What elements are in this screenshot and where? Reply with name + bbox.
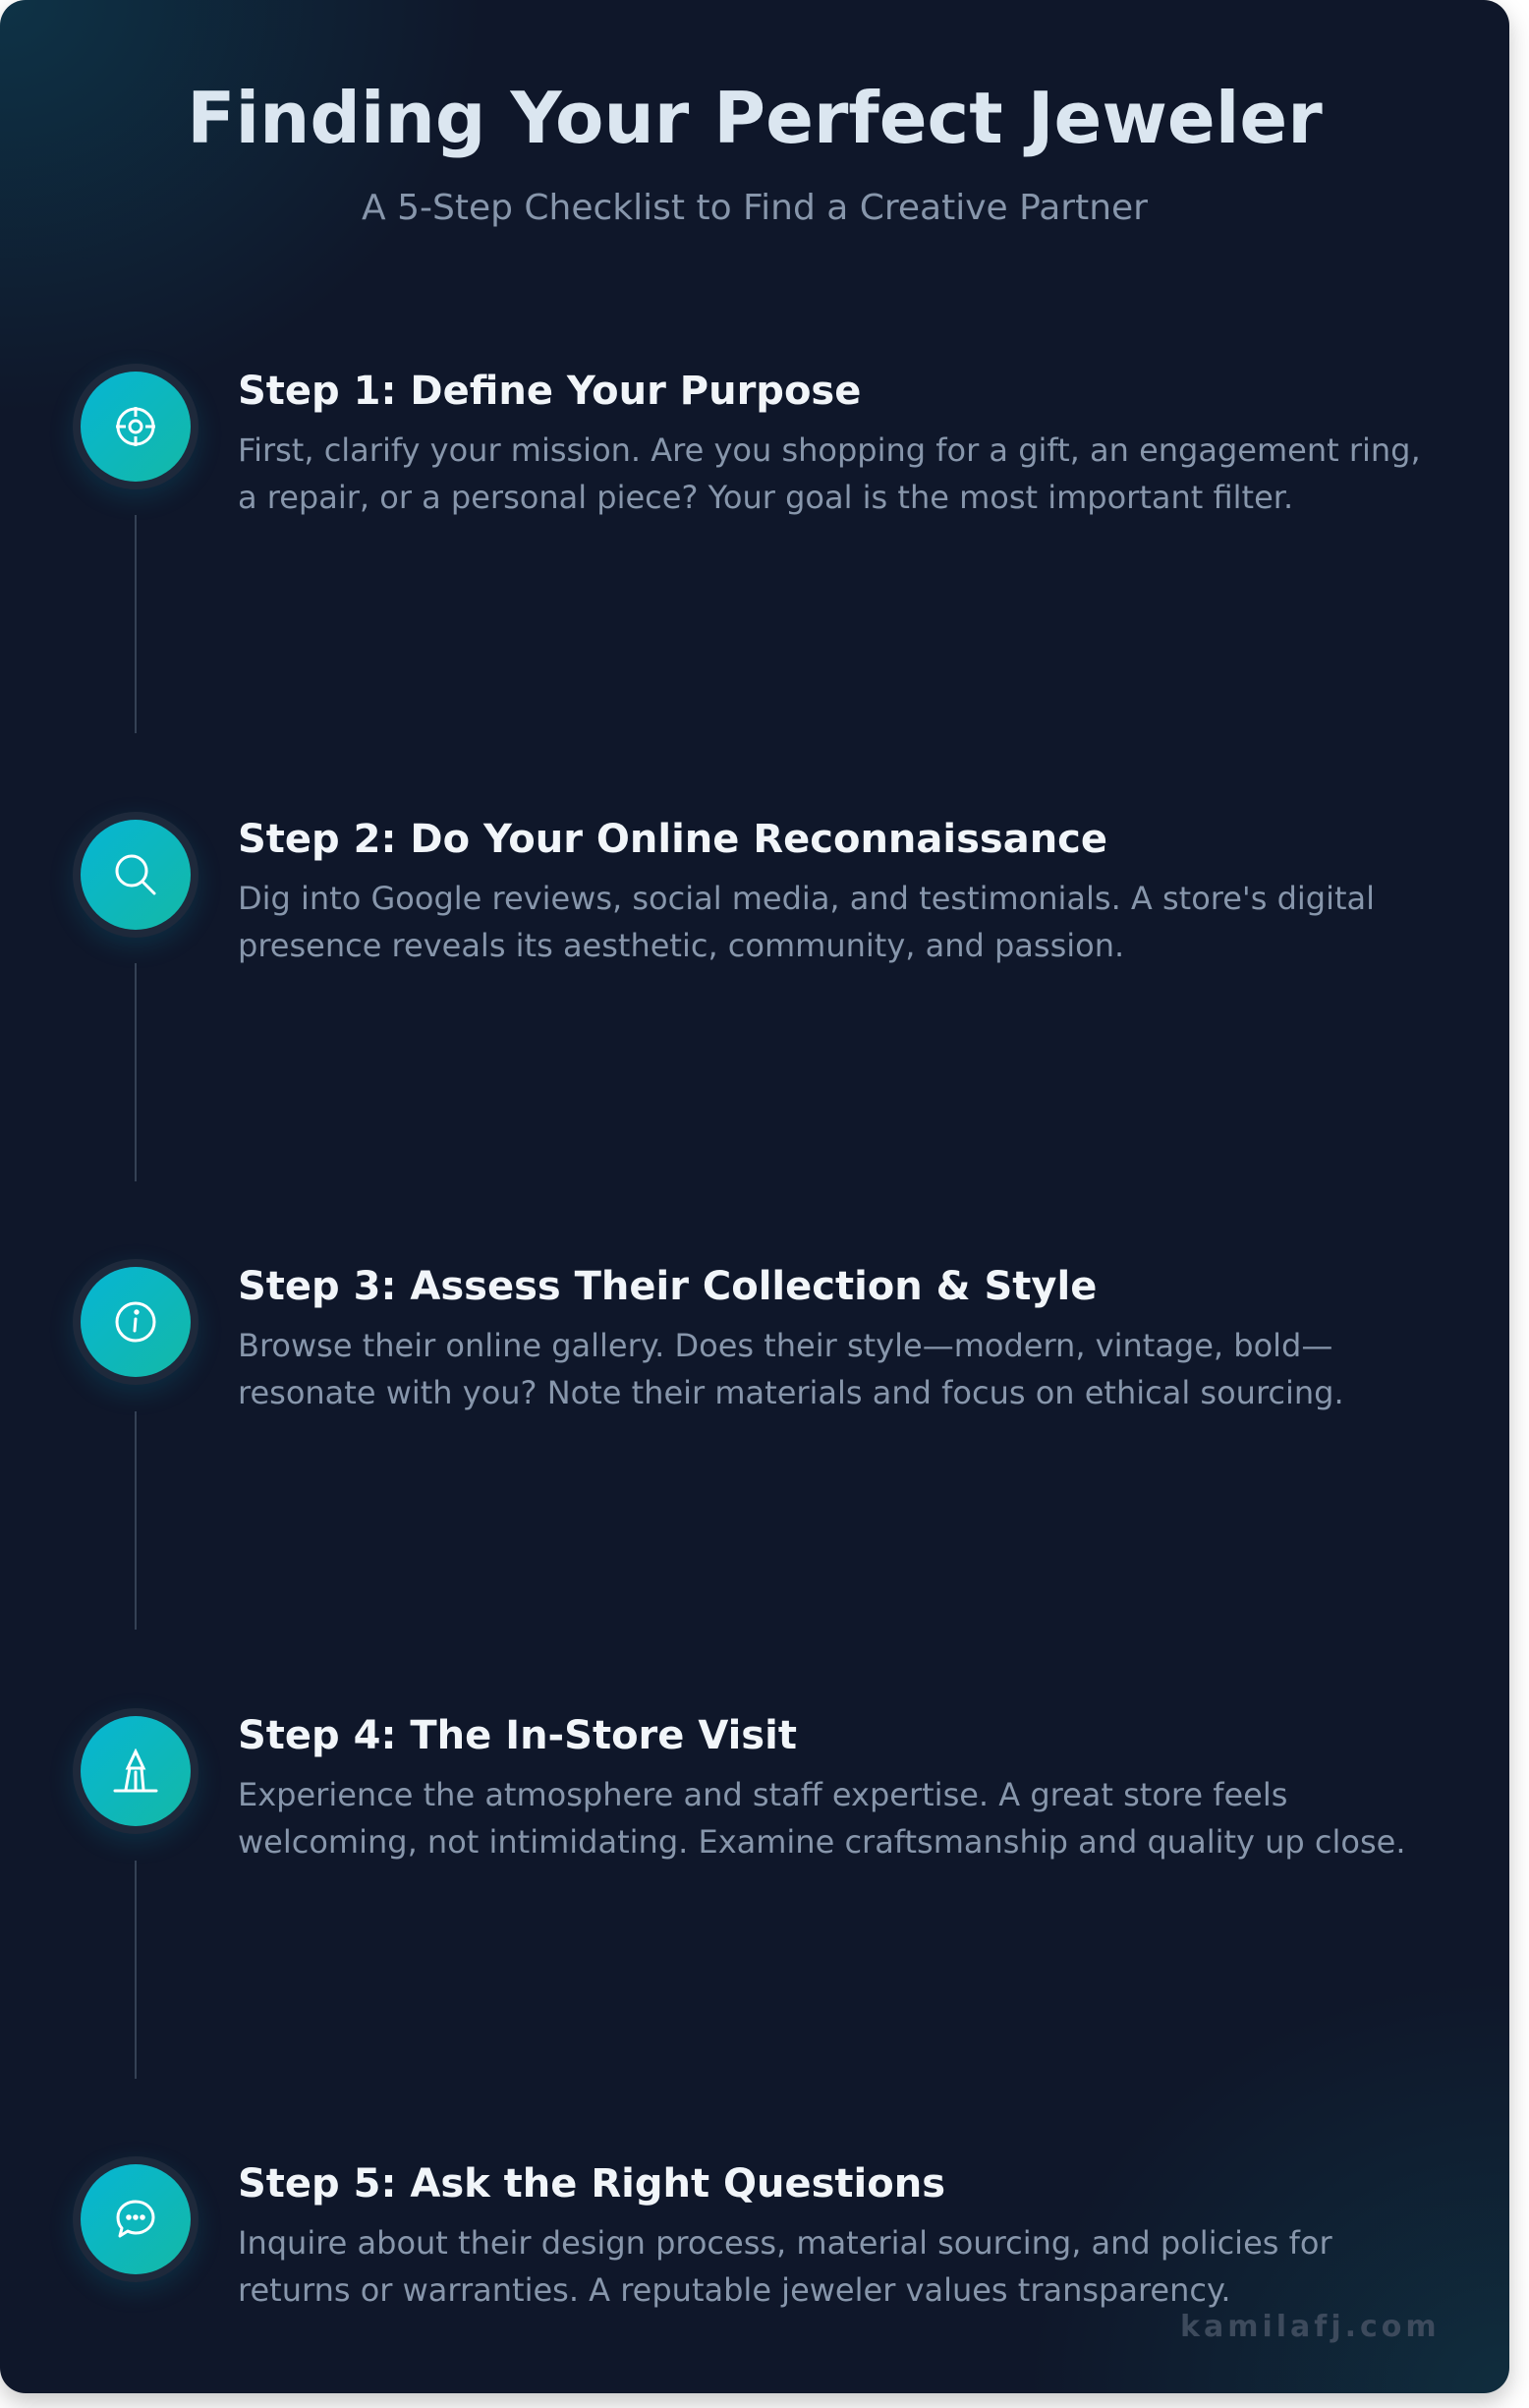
icon: search step 2 <box>73 812 198 938</box>
step 1 text: a repair, or a personal piece? Your goal is the most important filter. <box>238 479 1293 516</box>
step 4 text: welcoming, not intimidating. Examine craftsmanship and quality up close. <box>238 1823 1405 1861</box>
title: Finding Your Perfect Jeweler <box>187 77 1323 159</box>
step 2 text: Dig into Google reviews, social media, and testimonials. A store's digital <box>238 880 1375 917</box>
icon: chat step 5 <box>73 2156 198 2282</box>
subtitle: A 5-Step Checklist to Find a Creative Partner <box>362 188 1148 228</box>
step 3 text: Browse their online gallery. Does their style—modern, vintage, bold— <box>238 1327 1332 1364</box>
step 5 heading: Step 5: Ask the Right Questions <box>238 2161 945 2207</box>
step 4 text <box>238 1776 1405 1861</box>
step 1 text: First, clarify your mission. Are you shopping for a gift, an engagement ring, <box>238 431 1421 469</box>
step 3 text <box>238 1327 1344 1411</box>
step 4 text: Experience the atmosphere and staff expertise. A great store feels <box>238 1776 1287 1813</box>
step 4 heading: Step 4: The In-Store Visit <box>238 1713 797 1758</box>
step 1 heading: Step 1: Define Your Purpose <box>238 369 861 414</box>
icon: store step 4 <box>73 1708 198 1834</box>
step 2 heading: Step 2: Do Your Online Reconnaissance <box>238 817 1107 862</box>
step 2 text: presence reveals its aesthetic, community, and passion. <box>238 927 1124 964</box>
step 5 text <box>238 2224 1332 2309</box>
step 5 text: returns or warranties. A reputable jeweler values transparency. <box>238 2271 1231 2309</box>
icon: target step 1 <box>73 364 198 489</box>
connector 2 <box>135 963 137 1181</box>
step 1 text <box>238 431 1421 516</box>
connector 1 <box>135 515 137 733</box>
step 3 heading: Step 3: Assess Their Collection & Style <box>238 1264 1097 1309</box>
connector 4 <box>135 1861 137 2079</box>
connector 3 <box>135 1411 137 1630</box>
step 5 text: Inquire about their design process, material sourcing, and policies for <box>238 2224 1332 2262</box>
step 3 text: resonate with you? Note their materials and focus on ethical sourcing. <box>238 1374 1344 1411</box>
step 2 text <box>238 880 1375 964</box>
watermark: kamilafj.com <box>1180 2310 1441 2344</box>
icon: info step 3 <box>73 1259 198 1385</box>
